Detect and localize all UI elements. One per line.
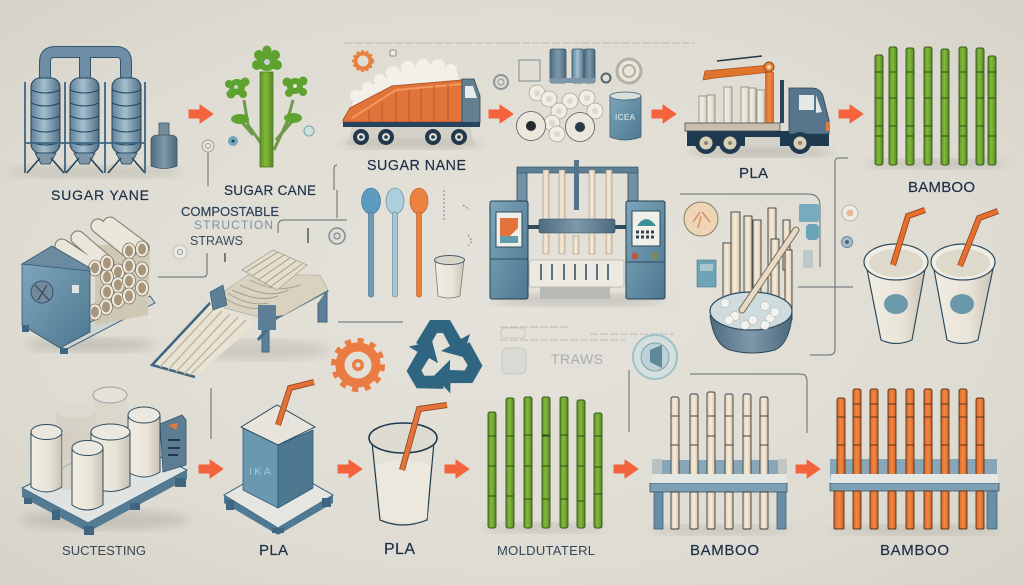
step: PLA pellets and can bbox=[516, 49, 641, 142]
step: PLA box with straw bbox=[224, 382, 333, 535]
step label: BAMBOO bbox=[880, 542, 949, 559]
left panel bbox=[490, 201, 528, 299]
cab bbox=[789, 88, 829, 134]
cylinders bbox=[550, 49, 595, 83]
step: sugar cane truck bbox=[342, 59, 482, 149]
step label: SUGAR NANE bbox=[367, 158, 466, 174]
storage tank bbox=[151, 123, 177, 168]
step label: BAMBOO bbox=[690, 542, 759, 559]
icon: orange gear bbox=[334, 341, 382, 389]
step label: PLA bbox=[739, 165, 768, 182]
faded cylinders bbox=[56, 387, 127, 460]
step: beige straws rack bbox=[650, 392, 790, 535]
cup bbox=[434, 256, 464, 298]
step: PLA cup with straw bbox=[369, 405, 447, 525]
faint straws panel: TRAWS bbox=[551, 351, 603, 367]
diagonal straw bbox=[742, 230, 796, 310]
step: cylinders on pallet bbox=[20, 387, 190, 535]
blue card bbox=[697, 260, 716, 287]
bowl bbox=[710, 292, 792, 353]
arrow bbox=[338, 460, 362, 478]
chute bbox=[152, 303, 257, 377]
bed bbox=[529, 260, 624, 287]
connector lines bbox=[158, 43, 853, 439]
step: spoons and cup bbox=[362, 188, 472, 298]
machine box bbox=[22, 246, 90, 272]
arrow bbox=[199, 460, 223, 478]
icon: recycle symbol bbox=[397, 320, 489, 400]
step label: SUCTESTING bbox=[62, 543, 146, 558]
step label: MOLDUTATERL bbox=[497, 543, 595, 558]
arrow bbox=[489, 105, 513, 123]
straws bbox=[723, 208, 792, 324]
truck cab bbox=[462, 79, 480, 123]
truck body bbox=[343, 80, 462, 122]
step: sugar silos bbox=[7, 52, 183, 178]
icon: teal dots bbox=[228, 126, 314, 146]
icons by lines bbox=[842, 205, 858, 248]
heading: compostable straws bbox=[181, 204, 279, 248]
heading: compostable straws: COMPOSTABLE bbox=[181, 204, 279, 219]
icon: small orange gear bbox=[353, 51, 373, 71]
heading: compostable straws: STRUCTION bbox=[194, 218, 273, 232]
step: orange straws rack bbox=[830, 389, 1000, 535]
arrow bbox=[189, 105, 213, 123]
cylinders bbox=[31, 407, 160, 510]
spoon orange bbox=[410, 188, 428, 297]
arrow bbox=[445, 460, 469, 478]
arrow bbox=[652, 105, 676, 123]
step: tube machine bbox=[22, 224, 155, 354]
step: green bamboo bbox=[485, 397, 605, 533]
faint straws panel bbox=[501, 328, 677, 379]
icon: small square bbox=[390, 50, 396, 56]
step label: BAMBOO bbox=[908, 179, 975, 196]
tubes on truck bbox=[699, 87, 765, 123]
box bbox=[243, 428, 278, 508]
platform bbox=[60, 296, 155, 350]
base bbox=[224, 464, 333, 528]
straws in machine bbox=[543, 170, 612, 254]
rolls bbox=[222, 275, 328, 318]
arrow bbox=[796, 460, 820, 478]
arrow bbox=[614, 460, 638, 478]
icon: small ring bbox=[202, 140, 214, 152]
pipes bbox=[45, 52, 126, 78]
truck cargo bbox=[349, 59, 461, 110]
frame bbox=[517, 170, 638, 205]
silo tanks bbox=[25, 78, 145, 173]
step: bamboo stalks bbox=[866, 47, 1006, 169]
cups with straws bbox=[864, 210, 998, 344]
lens icon bbox=[633, 335, 677, 379]
crane bbox=[703, 56, 784, 123]
step label: SUGAR YANE bbox=[51, 187, 149, 203]
flatbed bbox=[685, 123, 780, 131]
right panel bbox=[626, 201, 665, 299]
cup 2 bbox=[931, 211, 998, 344]
stack of straws bbox=[242, 250, 307, 290]
tube stack bbox=[62, 224, 150, 325]
conveyor frame bbox=[262, 290, 327, 352]
spoon light blue bbox=[386, 188, 404, 297]
step label: SUGAR CANE bbox=[224, 183, 316, 198]
can: ICEA bbox=[615, 113, 636, 122]
pallet bbox=[22, 438, 187, 523]
device bbox=[160, 415, 186, 472]
disk icon bbox=[684, 202, 718, 236]
cup 1 bbox=[864, 210, 928, 344]
right cards bbox=[799, 204, 819, 268]
step: sugar cane plant bbox=[225, 46, 308, 167]
heading: compostable straws: STRAWS bbox=[190, 234, 243, 248]
square icon bbox=[519, 60, 540, 81]
step: straw conveyor bbox=[152, 250, 330, 377]
icon: rings on lines bbox=[173, 228, 345, 262]
spoon blue bbox=[362, 188, 380, 297]
step: crane truck bbox=[685, 56, 832, 157]
step label: PLA bbox=[384, 541, 415, 558]
step: PLA box with straw: IKA bbox=[249, 466, 272, 478]
arrow bbox=[839, 105, 863, 123]
central moulding machine bbox=[490, 160, 666, 306]
step label: PLA bbox=[259, 542, 288, 559]
step: straws in bowl bbox=[684, 202, 819, 353]
gear ring bbox=[602, 59, 641, 83]
icon: ring bbox=[494, 75, 508, 89]
